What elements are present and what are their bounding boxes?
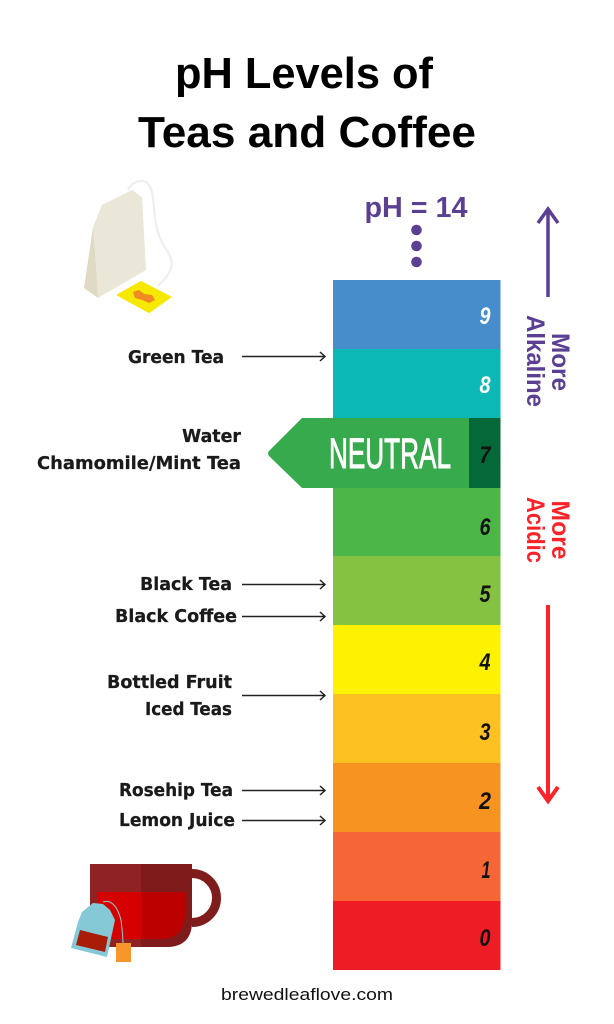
arrow: black tea (242, 580, 325, 589)
label: black tea: Black Tea (140, 574, 232, 595)
scale numbers: 2 (478, 788, 492, 815)
label: lemon juice: Lemon Juice (119, 810, 235, 831)
scale numbers: 8 (480, 372, 491, 399)
arrow: bottled fruit iced teas (242, 691, 325, 700)
scale numbers: 0 (480, 925, 491, 952)
label: water and chamomile (37, 426, 241, 474)
label: water and chamomile: Chamomile/Mint Tea (37, 453, 241, 474)
scale numbers: 9 (480, 303, 491, 330)
neutral marker: NEUTRAL (329, 430, 451, 478)
icon: tea bag (84, 181, 172, 312)
neutral marker (268, 418, 500, 488)
scale numbers (478, 303, 492, 952)
ellipsis dots (411, 225, 422, 267)
footer website: brewedleaflove.com (221, 986, 393, 1004)
scale numbers: 3 (480, 719, 491, 746)
label: water and chamomile: Water (182, 426, 241, 447)
text: more acidic (521, 497, 574, 563)
arrow: black coffee (242, 612, 325, 621)
text: more alkaline: More (546, 333, 574, 391)
label: bottled fruit iced teas (107, 672, 232, 720)
text: more alkaline (521, 315, 574, 407)
title: Teas and Coffee (138, 108, 476, 157)
label: black coffee: Black Coffee (115, 606, 237, 627)
pH scale bars (333, 280, 500, 970)
text: more acidic: More (546, 500, 574, 560)
label: bottled fruit iced teas: Bottled Fruit (107, 672, 232, 693)
title: pH Levels of (175, 49, 433, 98)
pH 14 label: pH = 14 (364, 192, 468, 224)
arrow: rosehip tea (242, 786, 325, 795)
arrow: green tea (242, 352, 325, 361)
scale numbers: 4 (479, 649, 490, 676)
arrow: more acidic (538, 605, 558, 801)
text: more acidic: Acidic (521, 497, 549, 563)
label: bottled fruit iced teas: Iced Teas (145, 699, 232, 720)
scale numbers: 1 (482, 857, 490, 884)
scale numbers: 7 (480, 442, 492, 469)
label: rosehip tea: Rosehip Tea (119, 780, 233, 801)
scale numbers: 5 (480, 581, 491, 608)
arrow: more alkaline (538, 209, 558, 297)
scale numbers: 6 (480, 514, 491, 541)
title (138, 49, 476, 157)
label: green tea: Green Tea (128, 347, 224, 368)
icon: tea mug with tea bag (71, 864, 216, 962)
arrow: lemon juice (242, 816, 325, 825)
text: more alkaline: Alkaline (521, 315, 549, 407)
